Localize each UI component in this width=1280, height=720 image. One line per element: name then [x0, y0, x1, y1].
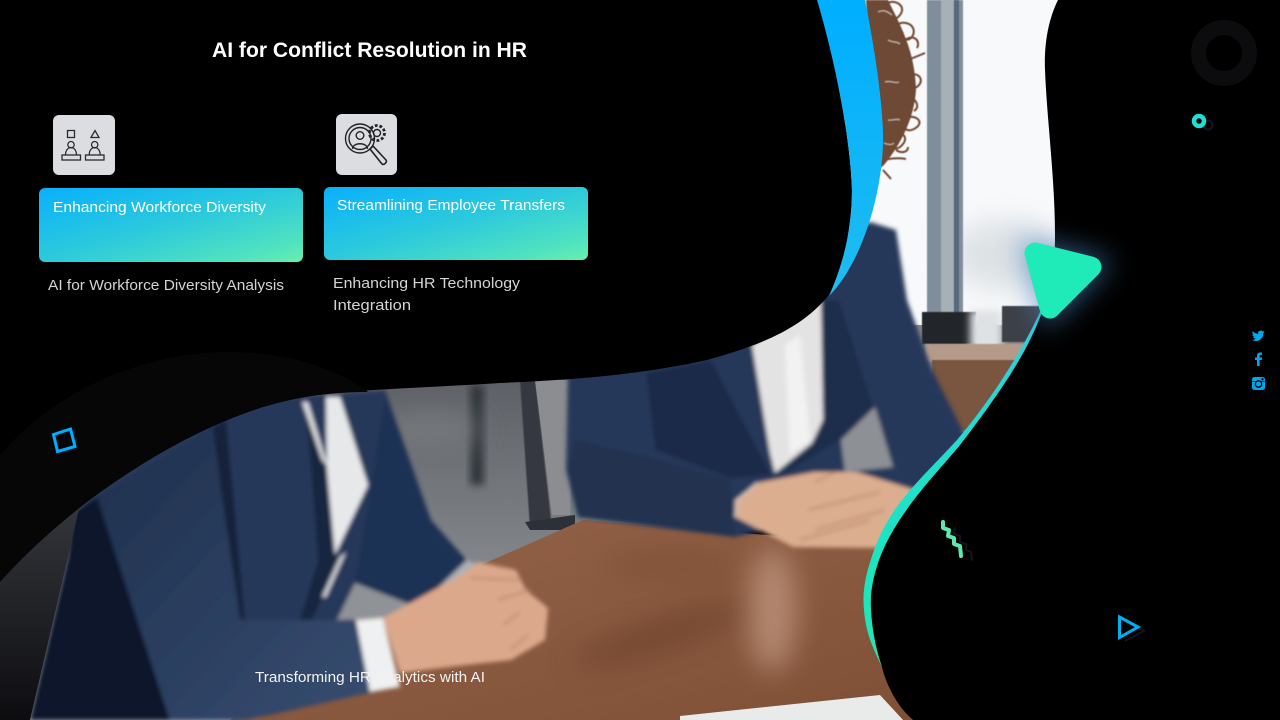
decoration: large dark ring	[1198, 28, 1250, 78]
top-left black panel	[0, 0, 852, 582]
icon: magnifier with person and gear	[336, 114, 397, 175]
text: technology integration description: Enhancing HR Technology	[333, 275, 521, 292]
table	[230, 520, 1000, 720]
icon: large play triangle	[1035, 253, 1091, 308]
woman in navy suit	[566, 222, 965, 548]
man in navy suit	[30, 390, 548, 720]
decoration: blue play outline	[1120, 617, 1144, 641]
text: technology integration description: Integration	[333, 297, 411, 314]
decoration: blue tilted square	[54, 429, 77, 453]
title: AI for Conflict Resolution in HR	[212, 39, 527, 62]
icon: instagram	[1252, 377, 1265, 390]
icon: facebook	[1255, 352, 1262, 366]
glow behind play triangle	[1035, 253, 1091, 308]
hair	[866, 0, 925, 179]
teal swoosh	[864, 312, 1042, 667]
card: enhancing workforce diversity	[39, 188, 303, 262]
social icons	[1252, 331, 1265, 390]
panel: employee transfers	[324, 114, 588, 314]
decoration: small teal ring	[1194, 116, 1212, 130]
blue swoosh	[817, 0, 883, 296]
card: streamlining employee transfers: Streamlining Employee Transfers	[337, 197, 565, 214]
faint blob on lower-left of black panel	[0, 352, 368, 582]
decoration: green zigzag	[943, 522, 972, 560]
right black panel	[871, 0, 1280, 720]
icon: people with shapes	[53, 115, 115, 175]
footer caption: Transforming HR Analytics with AI	[255, 669, 485, 686]
icon: twitter	[1252, 331, 1265, 341]
card: enhancing workforce diversity: Enhancing Workforce Diversity	[53, 199, 267, 216]
card: streamlining employee transfers	[324, 187, 588, 260]
panel: workforce diversity	[39, 115, 303, 294]
text: workforce diversity description: AI for Workforce Diversity Analysis	[48, 277, 284, 294]
